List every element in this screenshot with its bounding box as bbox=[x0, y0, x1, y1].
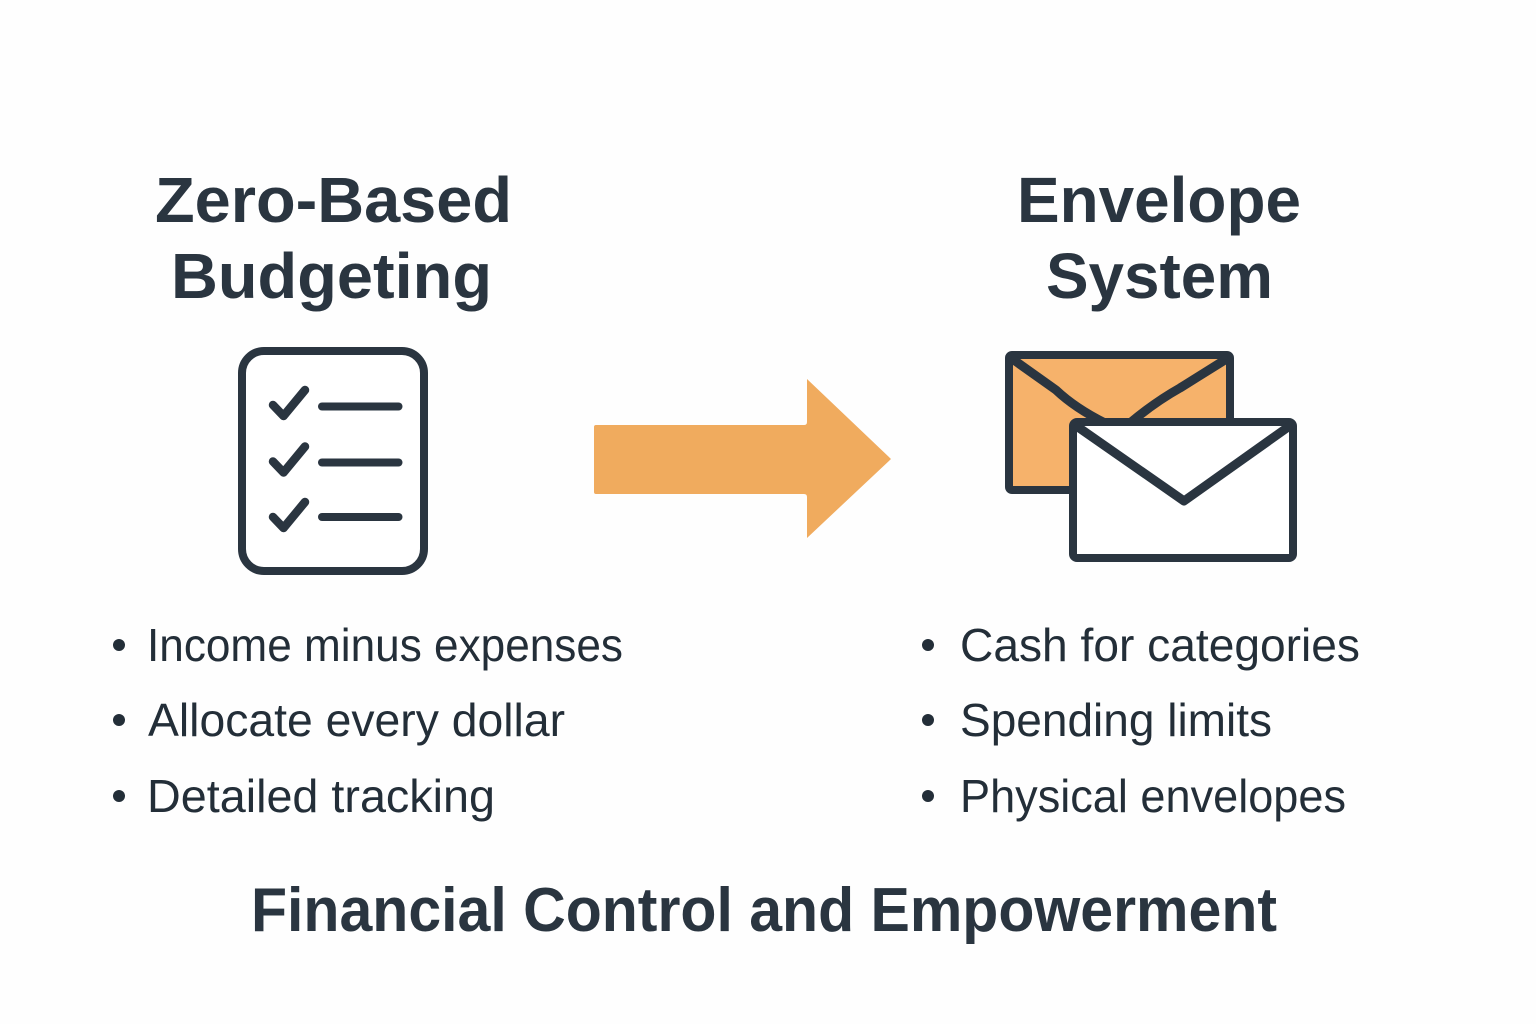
bullet list: zero-based budgeting: Detailed tracking bbox=[147, 770, 495, 822]
bullet list: zero-based budgeting: Income minus expenses bbox=[147, 619, 623, 671]
heading: Envelope System: System bbox=[1046, 240, 1273, 312]
arrow: orange pointing right bbox=[594, 379, 891, 538]
footer title: Financial Control and Empowerment bbox=[251, 876, 1277, 945]
back envelope in orange bbox=[1009, 355, 1230, 490]
front envelope in white bbox=[1073, 422, 1293, 558]
bullet list: envelope system bbox=[922, 619, 1360, 822]
bullet list: envelope system: Physical envelopes bbox=[960, 770, 1346, 822]
heading: Zero-Based Budgeting: Zero-Based bbox=[155, 164, 512, 236]
icon: checklist bbox=[242, 351, 424, 571]
bullet list: zero-based budgeting: Allocate every dollar bbox=[148, 694, 565, 746]
bullet list: envelope system: Spending limits bbox=[960, 694, 1272, 746]
bullet list: zero-based budgeting bbox=[113, 619, 623, 822]
icon: two envelopes bbox=[1009, 355, 1293, 558]
bullet list: envelope system: Cash for categories bbox=[960, 619, 1360, 671]
heading: Zero-Based Budgeting: Budgeting bbox=[171, 240, 492, 312]
heading: Zero-Based Budgeting bbox=[155, 164, 512, 312]
heading: Envelope System bbox=[1017, 164, 1301, 312]
heading: Envelope System: Envelope bbox=[1017, 164, 1301, 236]
